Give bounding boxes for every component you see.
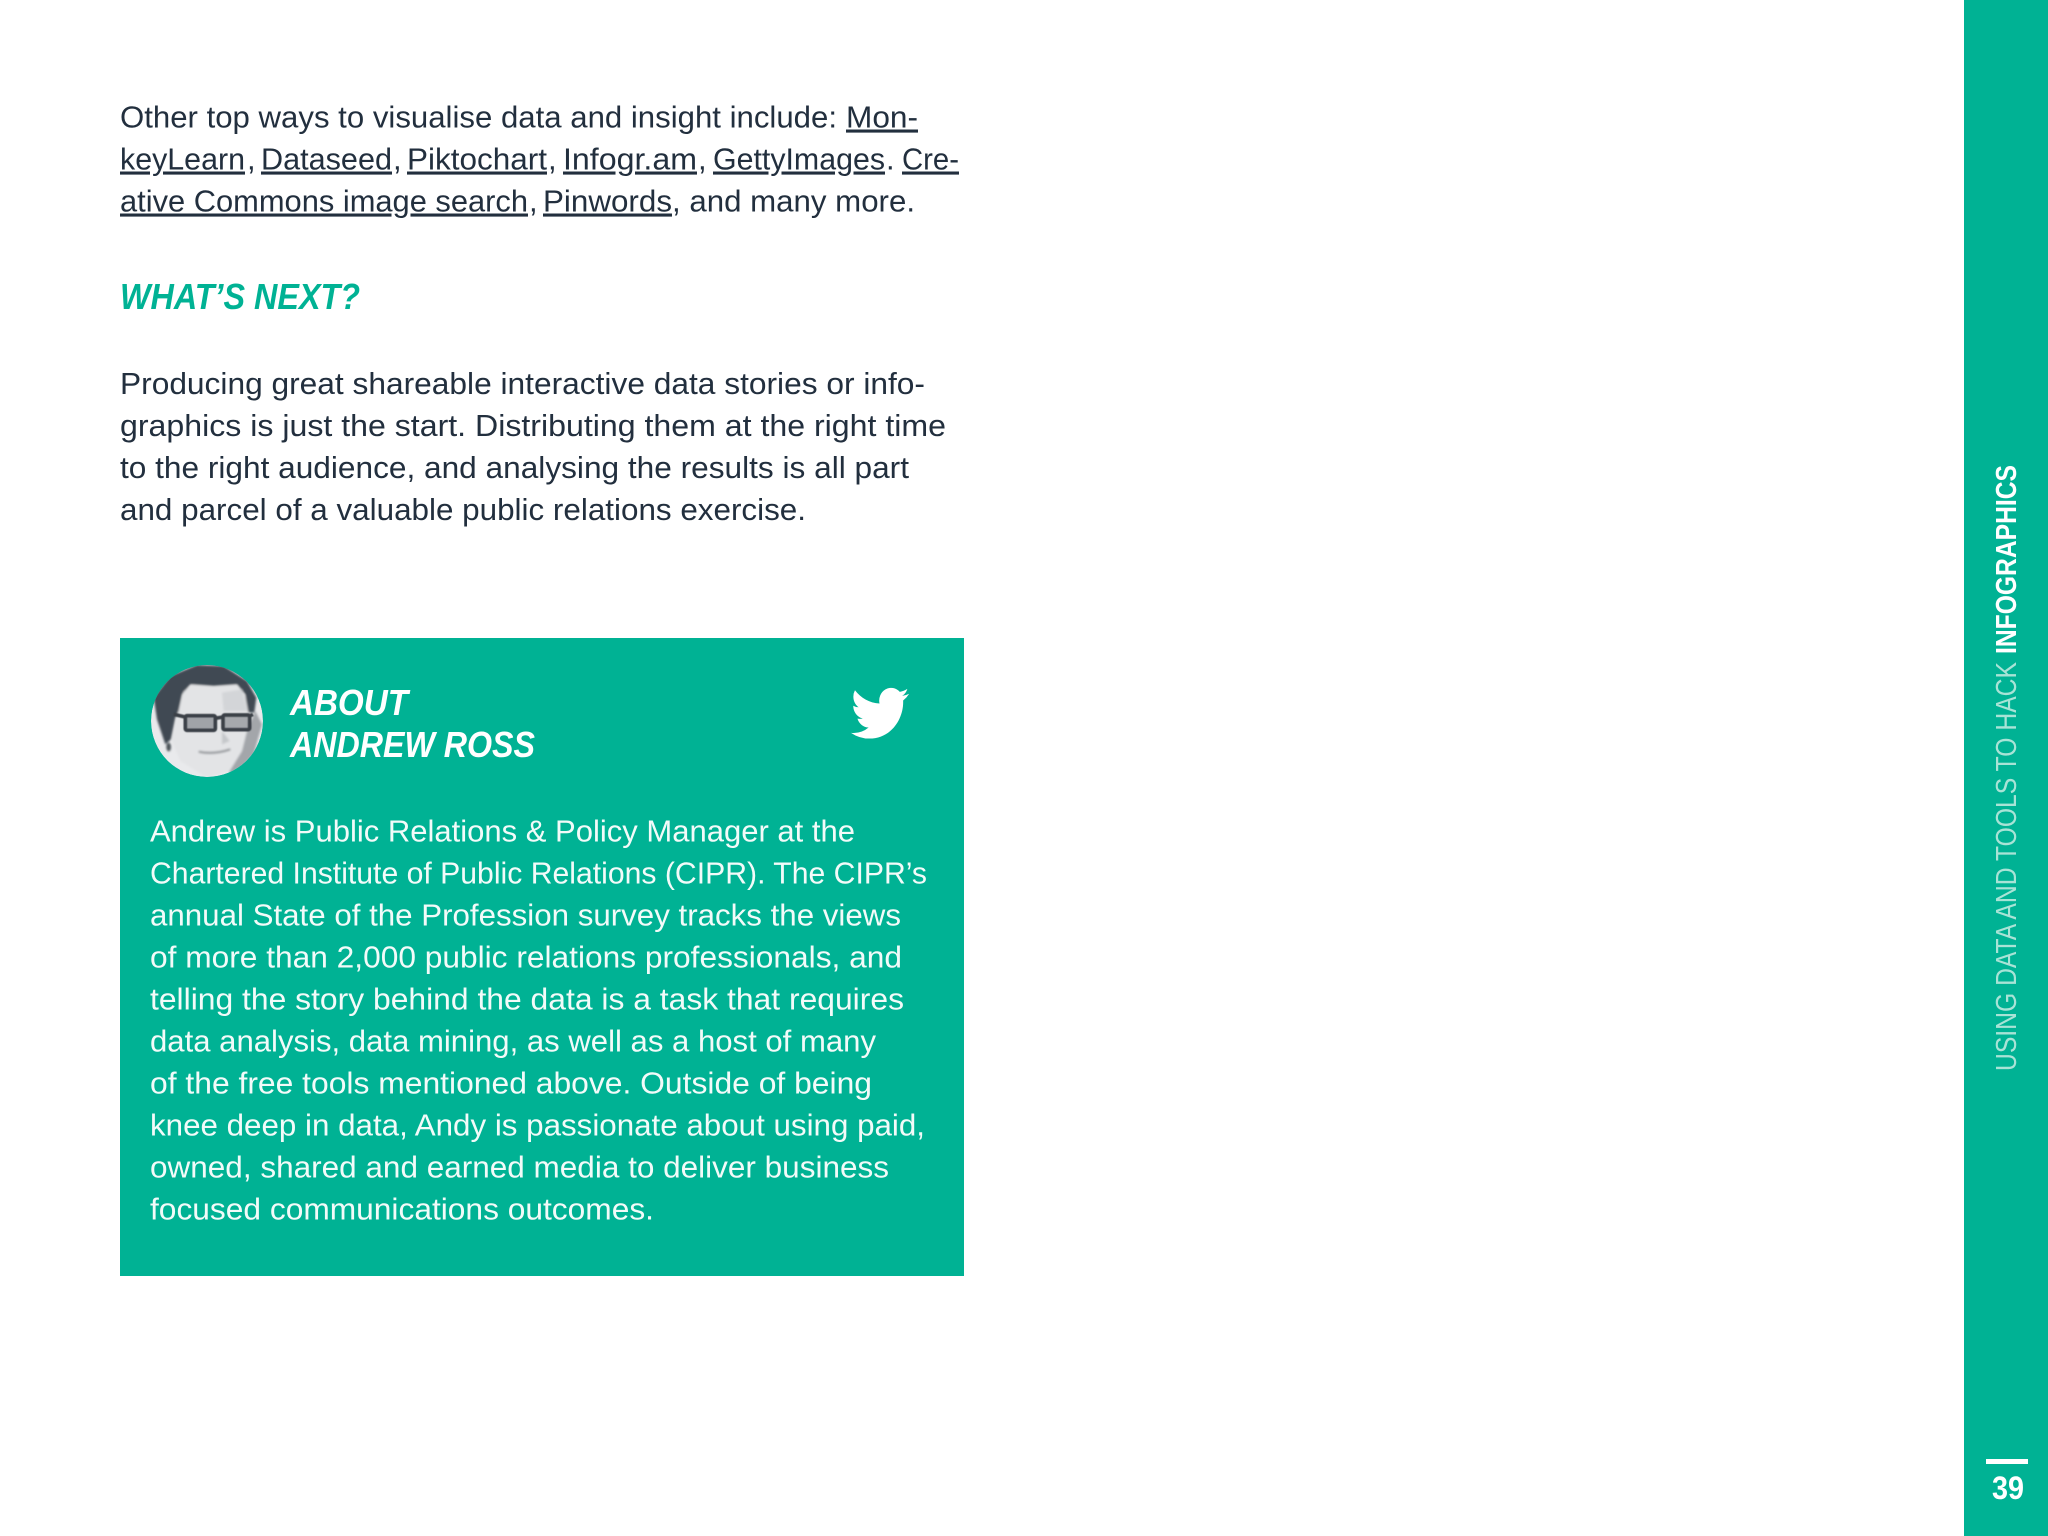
sidebar background <box>1964 0 2048 1536</box>
biography text: data analysis, data mining, as well as a host of many <box>150 1024 876 1058</box>
panel: about Andrew Ross <box>120 638 964 1276</box>
intro paragraph: other tools <box>120 100 959 218</box>
intro paragraph: other tools: , <box>698 142 707 176</box>
heading: what's next: WHAT’S NEXT? <box>120 276 360 317</box>
biography text: owned, shared and earned media to deliver business <box>150 1150 889 1184</box>
page number: 39 <box>1992 1470 2024 1506</box>
portrait photo <box>151 665 263 778</box>
intro paragraph: other tools: . <box>886 142 895 176</box>
about heading: ANDREW ROSS <box>289 724 535 765</box>
intro paragraph: other tools: , and many more. <box>672 184 915 218</box>
icon: twitter bird <box>851 688 909 739</box>
paragraph: what's next body <box>120 366 946 527</box>
intro paragraph: other tools: Other top ways to visualise data and insight include: <box>120 100 837 134</box>
sidebar section title, rotated: INFOGRAPHICS <box>1991 465 2023 654</box>
biography text: of the free tools mentioned above. Outside of being <box>150 1066 872 1100</box>
intro paragraph: other tools: Infogr.am <box>563 142 697 176</box>
biography text: annual State of the Profession survey tracks the views <box>150 898 901 932</box>
intro paragraph: other tools: Mon- <box>846 100 918 134</box>
panel background <box>120 638 964 1276</box>
intro paragraph: other tools: , <box>247 142 256 176</box>
intro paragraph: other tools: Cre- <box>902 142 959 176</box>
intro paragraph: other tools: ative Commons image search <box>120 184 528 218</box>
sidebar section title, rotated: USING DATA AND TOOLS TO HACK <box>1991 662 2023 1071</box>
biography text: Andrew is Public Relations & Policy Manager at the <box>150 814 855 848</box>
biography text: Chartered Institute of Public Relations (CIPR). The CIPR’s <box>150 856 927 890</box>
biography text: knee deep in data, Andy is passionate about using paid, <box>150 1108 925 1142</box>
sidebar <box>1964 0 2048 1536</box>
page number <box>1986 1459 2028 1506</box>
intro paragraph: other tools: keyLearn <box>120 142 245 176</box>
intro paragraph: other tools: , <box>393 142 402 176</box>
paragraph: what's next body: Producing great shareable interactive data stories or info- <box>120 366 925 401</box>
intro paragraph: other tools: , <box>529 184 538 218</box>
intro paragraph: other tools: Dataseed <box>261 142 392 176</box>
biography text <box>150 814 927 1226</box>
paragraph: what's next body: and parcel of a valuable public relations exercise. <box>120 492 806 527</box>
paragraph: what's next body: graphics is just the start. Distributing them at the right time <box>120 408 946 443</box>
intro paragraph: other tools: Pinwords <box>543 184 672 218</box>
paragraph: what's next body: to the right audience, and analysing the results is all part <box>120 450 909 485</box>
about heading: ABOUT <box>289 682 411 723</box>
about heading <box>289 682 535 765</box>
intro paragraph: other tools: GettyImages <box>713 142 885 176</box>
intro paragraph: other tools: Piktochart <box>407 142 547 176</box>
biography text: of more than 2,000 public relations professionals, and <box>150 940 902 974</box>
intro paragraph: other tools: , <box>548 142 557 176</box>
biography text: focused communications outcomes. <box>150 1192 654 1226</box>
biography text: telling the story behind the data is a task that requires <box>150 982 904 1016</box>
